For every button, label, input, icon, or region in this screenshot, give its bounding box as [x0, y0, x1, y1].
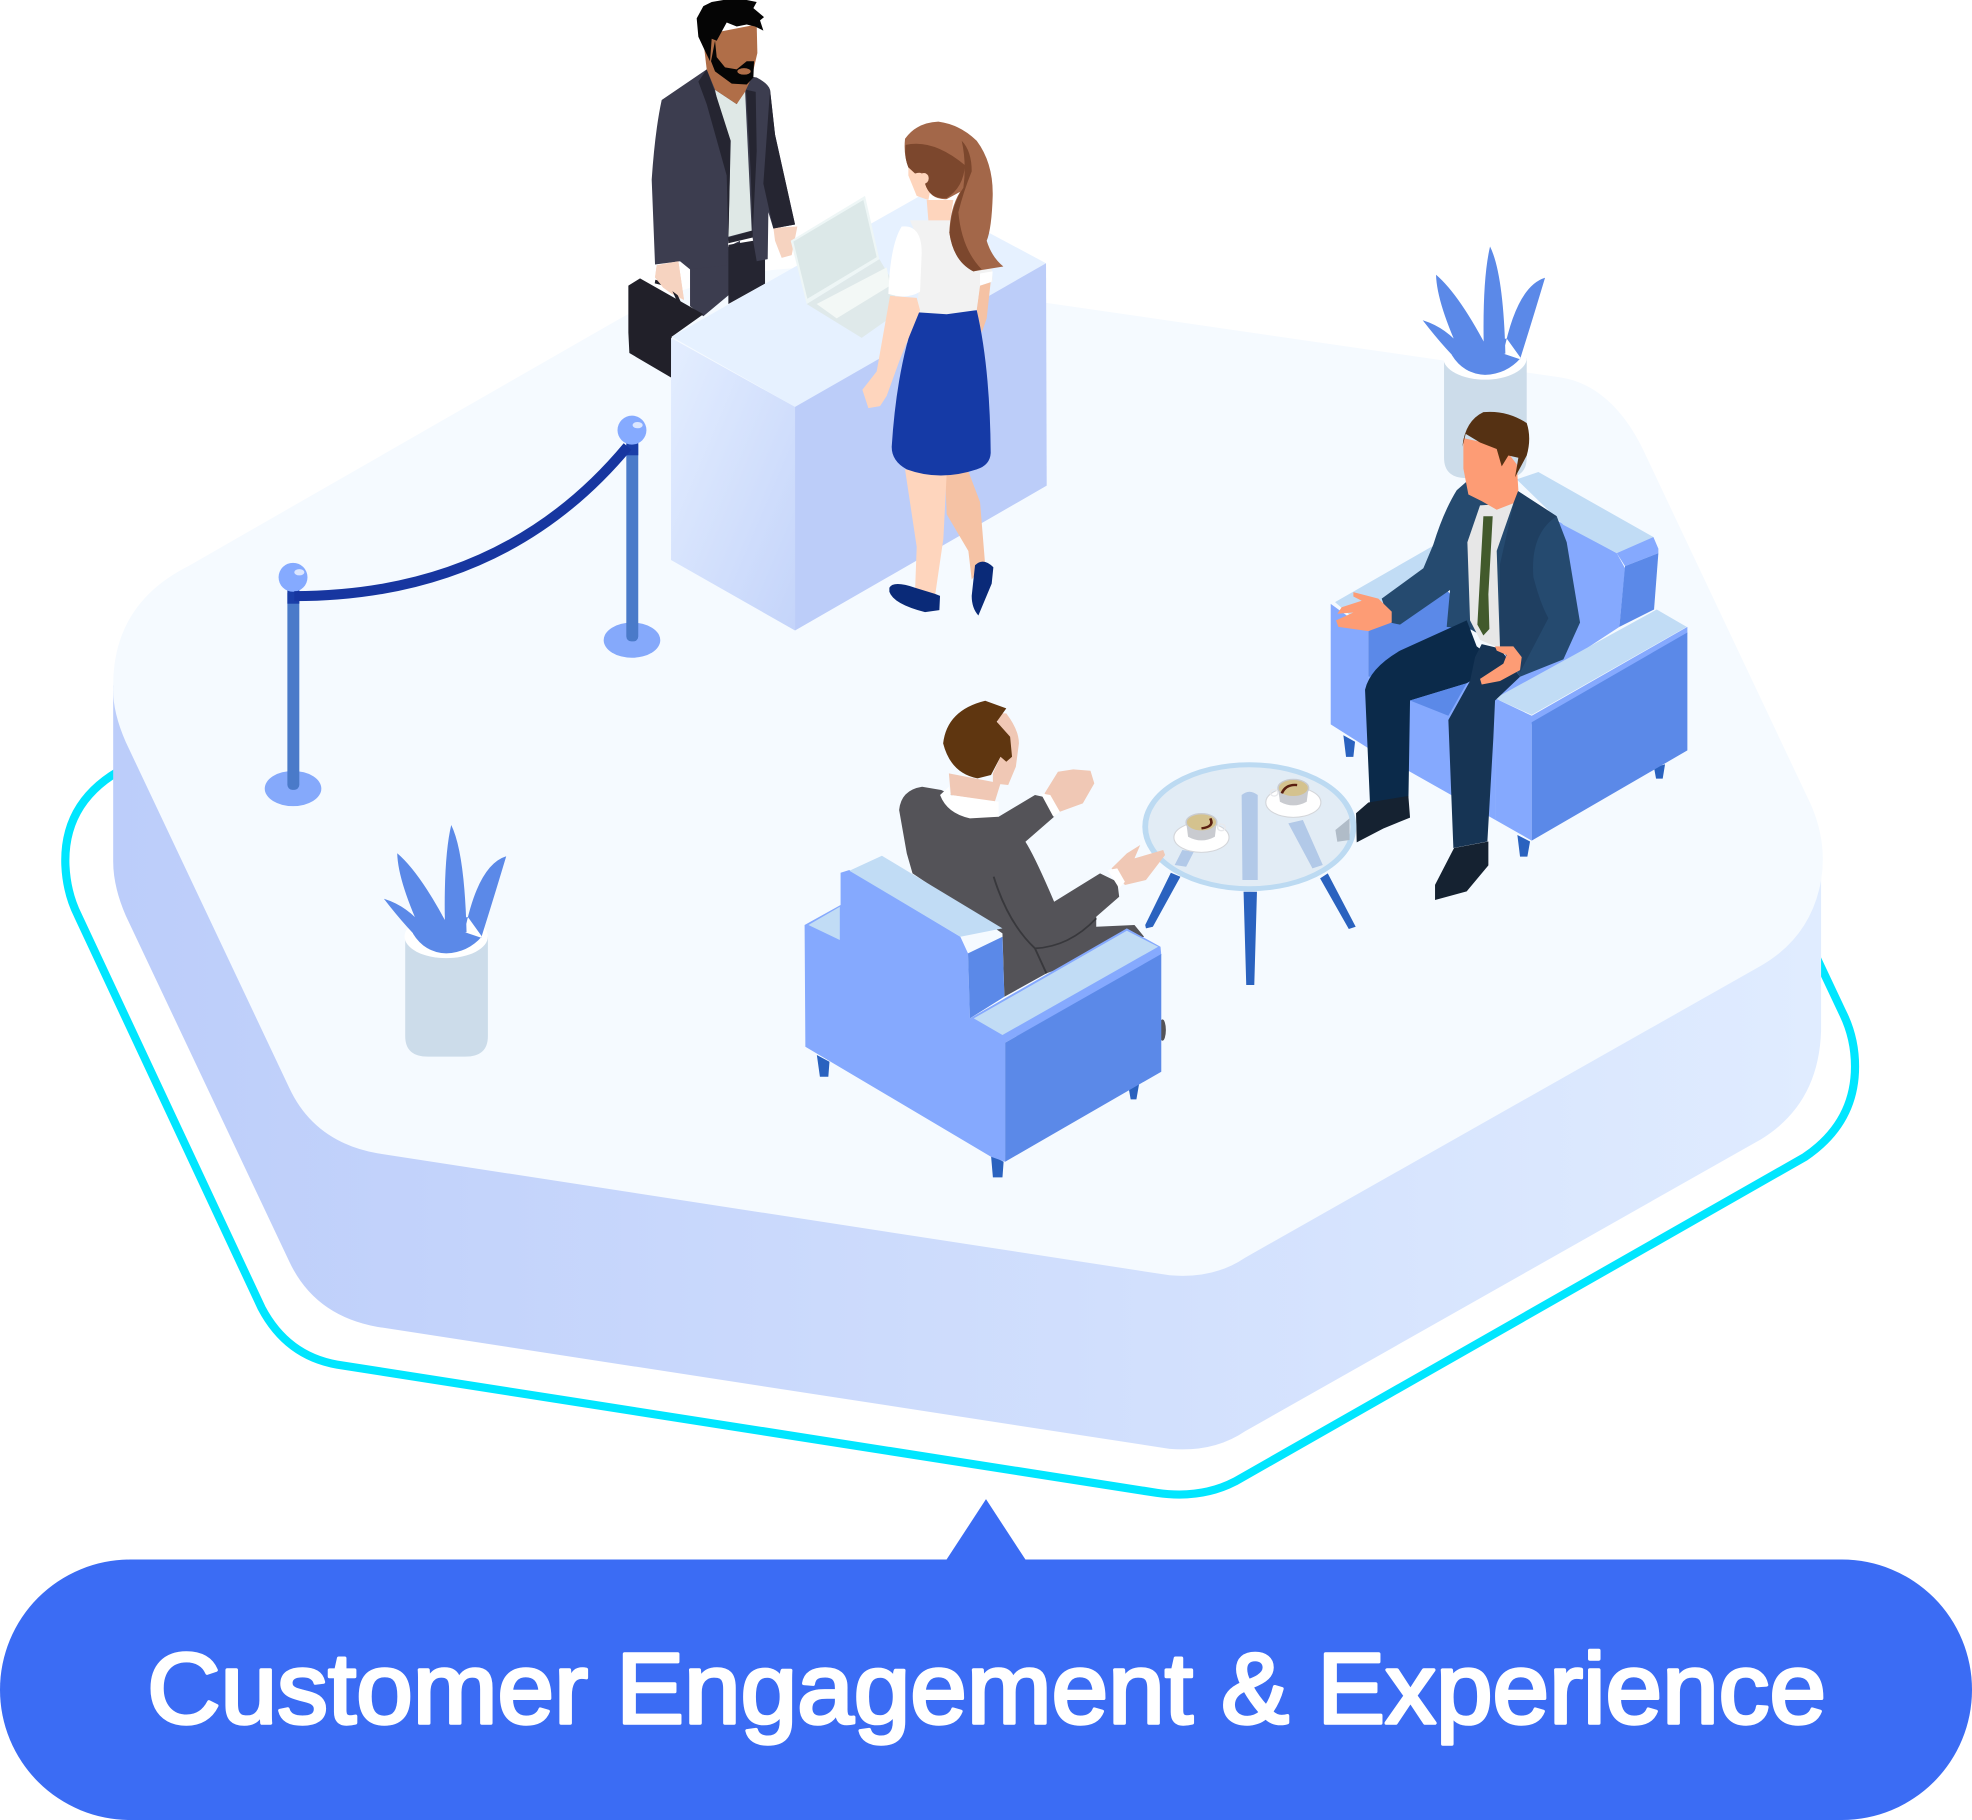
shoes: [1356, 796, 1488, 900]
platform top: [113, 268, 1823, 1276]
desk left face: [671, 338, 795, 631]
shirt: [1467, 503, 1513, 649]
right armchair with seated man: [1331, 412, 1687, 900]
ear and head skin: [993, 713, 1019, 785]
callout text: Customer Engagement & Experience: [147, 1633, 1826, 1745]
chair legs: [1343, 735, 1665, 857]
skirt: [892, 310, 991, 475]
desk top: [672, 196, 1046, 407]
back side panel: [968, 937, 1004, 1018]
hands and cuffs: [1045, 769, 1165, 885]
cup one: [1174, 814, 1229, 852]
laptop: [791, 196, 895, 338]
left arm top: [808, 907, 840, 940]
far leg: [1365, 620, 1500, 805]
right arm rest: [1495, 609, 1687, 715]
near leg: [1448, 644, 1520, 848]
neck: [949, 773, 1001, 802]
callout label: [0, 1499, 1972, 1820]
legs: [945, 471, 985, 580]
reflected legs: [1175, 792, 1323, 880]
platform: [113, 268, 1823, 1449]
briefcase: [628, 278, 703, 378]
front post: [265, 563, 321, 806]
knee: [1159, 1019, 1166, 1041]
front plant: [384, 825, 506, 1057]
front armchair with seated man: [805, 701, 1166, 1177]
rope barrier: [265, 416, 660, 806]
back plant: [1423, 247, 1545, 478]
seated man jacket: [1382, 482, 1580, 677]
desk right face: [795, 263, 1047, 631]
cup two: [1266, 779, 1321, 817]
woman at desk: [862, 122, 1003, 615]
chair side: [1005, 954, 1161, 1162]
chair back and left arm: [1331, 604, 1368, 748]
left arm: [862, 296, 920, 408]
cyan platform outline: [65, 767, 1855, 1495]
jacket: [652, 69, 795, 269]
table legs: [1145, 873, 1356, 985]
trousers: [690, 241, 740, 316]
hair: [697, 0, 764, 61]
head: [703, 24, 757, 104]
hair: [1462, 412, 1529, 477]
right arm: [970, 928, 1161, 1043]
shoes: [889, 562, 993, 615]
back post: [604, 416, 660, 658]
callout pointer: [946, 1499, 1026, 1561]
hands: [1336, 592, 1522, 684]
callout pill: [0, 1560, 1972, 1820]
chair seat and front: [1368, 646, 1577, 820]
hair: [905, 122, 1003, 271]
chair back top: [849, 856, 1002, 937]
lapels: [698, 69, 757, 243]
collar: [940, 787, 999, 818]
beard: [711, 41, 754, 84]
hair: [943, 701, 1012, 778]
coffee table: [1145, 765, 1356, 985]
tie: [1477, 516, 1493, 635]
reception desk: [671, 196, 1047, 631]
rope: [294, 446, 628, 596]
jacket fold: [994, 877, 1096, 973]
neck and face: [908, 167, 953, 220]
chair body: [805, 870, 1005, 1162]
platform side: [113, 685, 1821, 1449]
right arm: [977, 282, 991, 333]
glass top: [1145, 765, 1353, 889]
shirt: [715, 90, 752, 237]
man jacket: [899, 787, 1144, 997]
face: [1463, 438, 1518, 510]
top: [910, 220, 993, 314]
man with briefcase: [628, 0, 797, 378]
chair legs: [817, 1055, 1139, 1177]
hands: [655, 227, 797, 300]
